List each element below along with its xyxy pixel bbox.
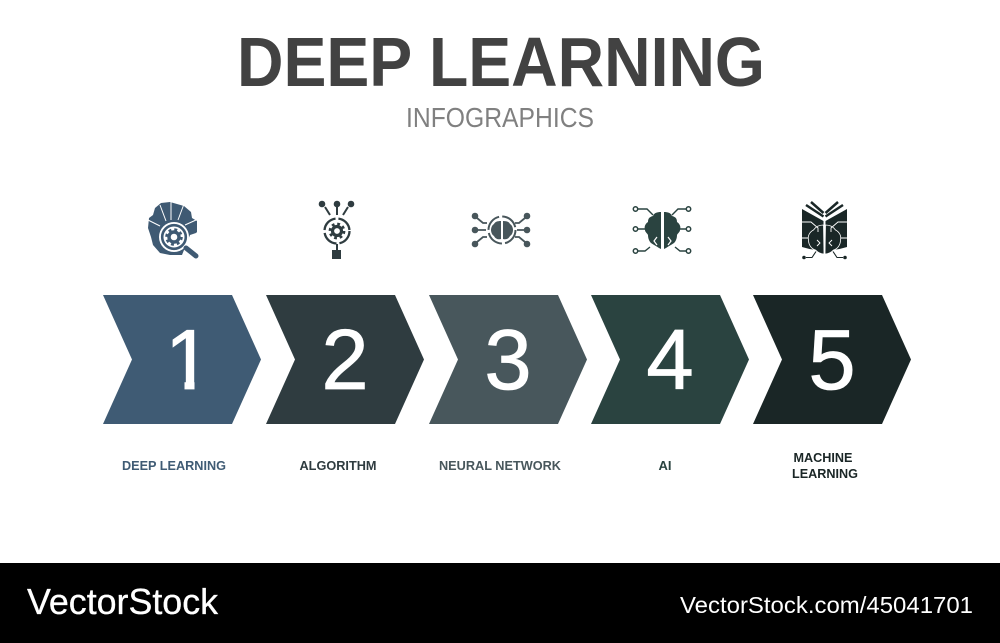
chevron 1: 1 (165, 313, 212, 408)
label 5: LEARNING (792, 466, 858, 481)
icon: algorithm gear (319, 201, 354, 259)
icon: AI brain circuit (633, 207, 691, 253)
icon: neural network brain (472, 213, 530, 247)
title: DEEP LEARNING (237, 23, 765, 101)
chevron 5: 5 (808, 313, 856, 408)
chevron 2: 2 (321, 313, 369, 408)
subtitle: INFOGRAPHICS (406, 102, 594, 133)
footer image id: VectorStock.com/45041701 (680, 592, 973, 618)
footer bar (0, 563, 1000, 643)
label 2: ALGORITHM (300, 458, 376, 473)
label 4: AI (658, 458, 672, 473)
label 3: NEURAL NETWORK (439, 458, 562, 473)
label 5 (792, 450, 858, 481)
label 5: MACHINE (794, 450, 853, 465)
icon: brain with magnifier and gear (148, 201, 197, 256)
chevron 4 (591, 295, 749, 424)
chevron 3: 3 (484, 313, 532, 408)
label 1: DEEP LEARNING (122, 458, 226, 473)
chevron 2 (266, 295, 424, 424)
footer logo: VectorStock (27, 581, 219, 622)
chevron 1 (103, 295, 261, 424)
chevron 4: 4 (646, 313, 694, 408)
icon: open book with brain (802, 202, 847, 259)
chevron 5 (753, 295, 911, 424)
chevron 3 (429, 295, 587, 424)
